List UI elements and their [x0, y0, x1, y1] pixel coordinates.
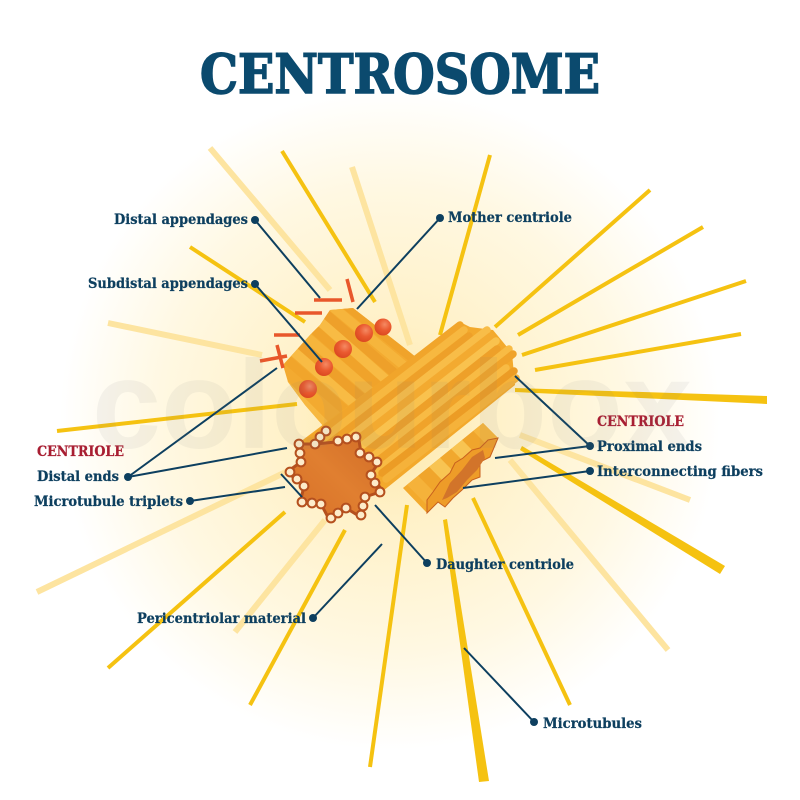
labels: Proximal ends: [597, 439, 702, 455]
leader dots: [124, 214, 594, 726]
labels: Mother centriole: [448, 210, 572, 226]
microtubule triplets hexagonal opening: [286, 427, 384, 522]
leader lines: [128, 218, 590, 722]
title: CENTROSOME: [200, 42, 600, 106]
labels: Daughter centriole: [436, 557, 574, 573]
labels: Distal ends: [37, 469, 119, 485]
second centriole tube with proximal end: [403, 423, 499, 514]
labels: CENTRIOLE: [37, 444, 124, 460]
labels: Microtubule triplets: [34, 494, 183, 510]
labels: Distal appendages: [114, 212, 248, 228]
microtubule rays: [37, 148, 767, 782]
labels: Interconnecting fibers: [597, 464, 763, 480]
mother centriole: [260, 278, 414, 425]
labels: Microtubules: [543, 716, 642, 732]
labels: Subdistal appendages: [88, 276, 248, 292]
labels: Pericentriolar material: [137, 611, 306, 627]
watermark: colourbox: [92, 336, 692, 475]
labels: [34, 210, 763, 732]
distal and subdistal appendages: [260, 279, 353, 368]
labels: CENTRIOLE: [597, 414, 684, 430]
daughter centriole: [286, 322, 516, 522]
